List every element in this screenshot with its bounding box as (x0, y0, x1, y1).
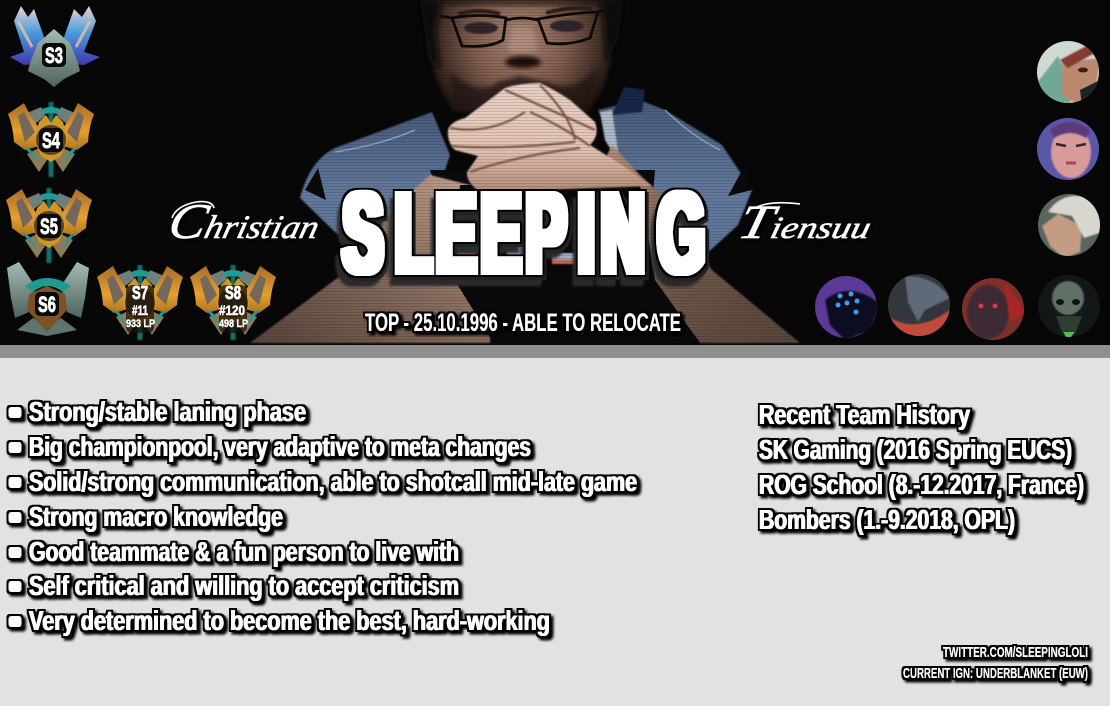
champion icon: hooded purple figure with blue lights (815, 276, 877, 338)
glasses (440, 10, 606, 46)
rank badge S7 with ladder rank 11 and 933 LP: 933 LP (126, 318, 155, 330)
history heading: Recent Team History (759, 399, 970, 430)
champion icon: purple-haired mage (1037, 118, 1099, 180)
player photo (250, 0, 800, 345)
title: player name: SLEEPING (342, 171, 705, 297)
team: Bombers: Bombers (1.-9.2018, OPL) (759, 504, 1015, 535)
strengths bullet list (9, 396, 637, 636)
strength 3: Solid/strong communication, able to shotcall mid-late game (29, 466, 637, 497)
panel: lower content background (0, 358, 1110, 706)
clasped fingers (450, 85, 595, 172)
rank badge S5: S5 (40, 214, 58, 239)
strength 7: Very determined to become the best, hard-working (29, 605, 550, 636)
strength 6: Self critical and willing to accept criticism (29, 570, 459, 601)
jersey stripes (457, 246, 578, 264)
rank badge S8 with ladder rank 120 and 498 LP: #120 (219, 302, 245, 318)
subtitle: role, birth date, relocation: TOP - 25.10.1996 - ABLE TO RELOCATE (365, 309, 681, 337)
bullet markers (9, 407, 21, 627)
rank badge S7 with ladder rank 11 and 933 LP: #11 (132, 302, 148, 318)
contact information (903, 644, 1088, 682)
rank badge S5 (6, 188, 92, 263)
strength 1: Strong/stable laning phase (29, 396, 306, 427)
rank badge S8 with ladder rank 120 and 498 LP: 498 LP (219, 318, 248, 330)
rank badge S6 (7, 262, 89, 336)
rank badge S4 (8, 102, 94, 177)
champion icon: horned armored champion (888, 274, 950, 336)
champion icon: silver-haired swordswoman (1037, 41, 1099, 103)
rank badge S8 with ladder rank 120 and 498 LP: S8 (225, 283, 241, 303)
strength 4: Strong macro knowledge (29, 501, 283, 532)
first name: Christian (163, 194, 327, 249)
strength 2: Big championpool, very adaptive to meta changes (29, 431, 531, 462)
gray divider band (0, 345, 1110, 358)
last name: Tiensuu (733, 196, 879, 249)
rank badge S4: S4 (42, 128, 61, 153)
rank badge S7 with ladder rank 11 and 933 LP: S7 (132, 283, 148, 303)
header panel: photo banner (0, 0, 1110, 345)
champion icon: undead skull (1038, 275, 1100, 337)
champion icon: white-haired woman in profile (1038, 194, 1100, 256)
rank badge S7 with ladder rank 11 and 933 LP (97, 265, 183, 340)
rank badge S8 with ladder rank 120 and 498 LP (190, 265, 276, 340)
recent team history (759, 399, 1084, 535)
strength 5: Good teammate & a fun person to live with (29, 536, 459, 567)
rank badge S6: S6 (38, 292, 56, 317)
champion icon: red-eyed brute (962, 278, 1024, 340)
rank badge S3 (10, 6, 100, 87)
rank badge S3: S3 (45, 43, 63, 68)
